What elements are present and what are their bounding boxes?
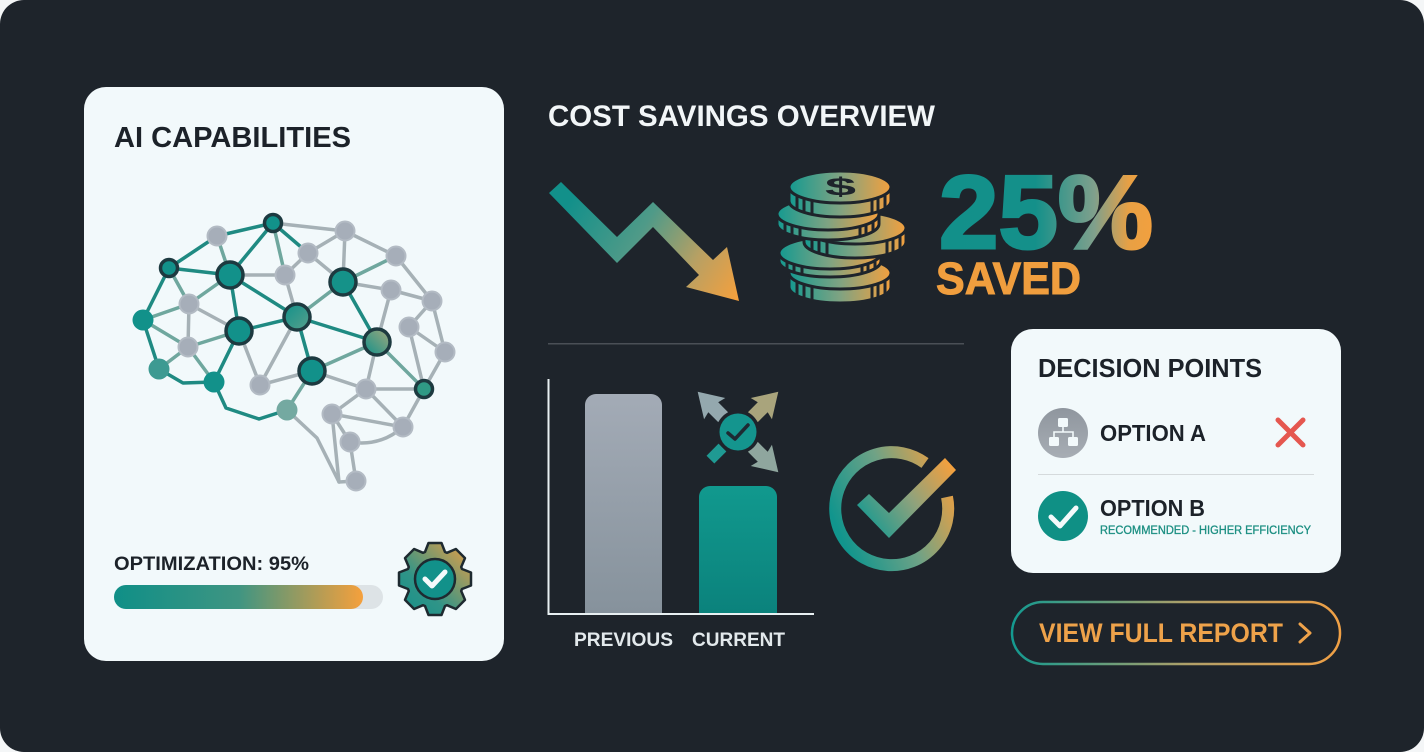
icon: downward trend arrow bbox=[549, 182, 739, 301]
heading: AI capabilities: AI CAPABILITIES bbox=[114, 122, 351, 154]
section divider bbox=[548, 343, 964, 344]
icon: gear with check bbox=[399, 543, 471, 615]
option B recommendation: RECOMMENDED - HIGHER EFFICIENCY bbox=[1100, 525, 1311, 537]
chart axes bbox=[548, 379, 814, 614]
panel: decision points bbox=[1011, 329, 1341, 573]
stat label: saved: SAVED bbox=[936, 253, 1081, 304]
optimization label: OPTIMIZATION: 95% bbox=[114, 553, 309, 575]
icon: option B check bbox=[1038, 491, 1088, 541]
stat: 25 percent: 25% bbox=[939, 155, 1153, 271]
heading: decision points: DECISION POINTS bbox=[1038, 353, 1262, 383]
icon: red cross bbox=[1278, 420, 1303, 445]
panel: AI capabilities bbox=[84, 87, 504, 661]
button: view full report: VIEW FULL REPORT bbox=[1039, 618, 1283, 648]
label: option B: OPTION B bbox=[1100, 495, 1205, 521]
icon: multi-directional arrows with check bbox=[687, 381, 789, 483]
neural network brain bbox=[132, 214, 454, 490]
optimization progress bar bbox=[114, 585, 383, 609]
label: previous: PREVIOUS bbox=[574, 630, 673, 651]
bar: current bbox=[699, 486, 777, 613]
bar: previous bbox=[585, 394, 662, 613]
label: current: CURRENT bbox=[692, 630, 785, 651]
heading: cost savings overview: COST SAVINGS OVERVIEW bbox=[548, 100, 936, 133]
bar chart: previous vs current bbox=[548, 379, 814, 651]
icon: coin stack bbox=[777, 171, 906, 303]
option divider bbox=[1038, 474, 1314, 475]
label: option A: OPTION A bbox=[1100, 420, 1206, 446]
button: view full report bbox=[1012, 602, 1340, 664]
icon: coin stack: $ bbox=[825, 173, 856, 201]
icon: large check in ring bbox=[835, 452, 956, 565]
icon: option A hierarchy bbox=[1038, 408, 1088, 458]
